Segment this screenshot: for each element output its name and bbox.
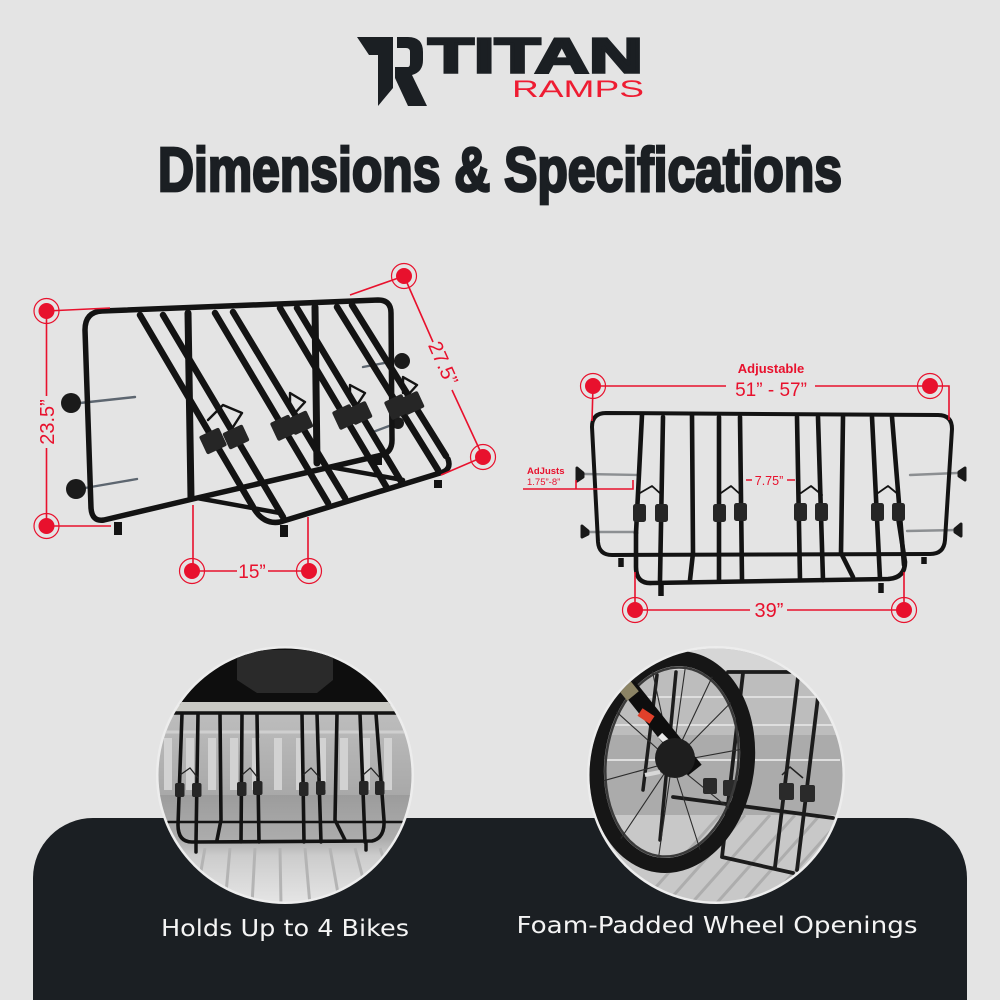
back frame bbox=[85, 300, 392, 520]
label adjusts: AdJusts bbox=[527, 466, 564, 477]
rubber knobs bbox=[61, 353, 410, 499]
back frame bbox=[592, 413, 952, 555]
wheel bars bbox=[636, 415, 904, 580]
side view rack bbox=[61, 300, 449, 537]
foam pads bbox=[199, 391, 425, 455]
photo border bbox=[587, 646, 845, 904]
label 39: 39” bbox=[755, 600, 783, 622]
front frame bbox=[253, 459, 449, 522]
rack legs bbox=[621, 557, 924, 596]
photo content bbox=[155, 645, 415, 905]
cross braces bbox=[197, 467, 403, 513]
label adjustable: Adjustable bbox=[738, 361, 804, 376]
label 15: 15” bbox=[238, 562, 266, 583]
uprights bbox=[188, 307, 317, 498]
front view dimension markers bbox=[580, 374, 942, 622]
title: Dimensions & Specifications bbox=[158, 136, 842, 205]
V hooks bbox=[208, 377, 417, 427]
photo content bbox=[583, 645, 850, 910]
photo border bbox=[156, 646, 414, 904]
rack legs bbox=[118, 457, 438, 537]
caption: holds bikes: Holds Up to 4 Bikes bbox=[161, 916, 409, 942]
dark footer panel bbox=[33, 818, 967, 1000]
label 27.5 depth: 27.5” bbox=[423, 338, 462, 389]
front view rack bbox=[577, 413, 965, 596]
adjustable rods bbox=[585, 473, 957, 532]
caption: foam padded: Foam-Padded Wheel Openings bbox=[516, 913, 918, 939]
label adjusts range: 1.75”-8” bbox=[527, 477, 560, 488]
foam pads bbox=[633, 503, 905, 522]
logo wordmark RAMPS: RAMPS bbox=[512, 76, 644, 103]
label 7.75: 7.75” bbox=[755, 474, 783, 488]
logo wordmark TITAN: TITAN bbox=[428, 30, 643, 84]
V hooks bbox=[640, 486, 899, 495]
adjustable rods bbox=[80, 361, 397, 488]
logo mark bbox=[357, 37, 427, 106]
front view dimension lines bbox=[523, 386, 949, 610]
side view dimension lines bbox=[46, 276, 483, 571]
wheel bars bbox=[140, 305, 446, 517]
photo: rack in truck bed bbox=[155, 645, 415, 905]
logo bbox=[357, 30, 644, 106]
rubber knobs bbox=[577, 468, 965, 537]
side view dimension markers bbox=[34, 264, 496, 584]
front frame bbox=[636, 517, 905, 583]
label 23.5 height: 23.5” bbox=[37, 399, 59, 445]
photo: wheel in rack bbox=[583, 645, 850, 910]
label 51 to 57: 51” - 57” bbox=[735, 380, 807, 401]
